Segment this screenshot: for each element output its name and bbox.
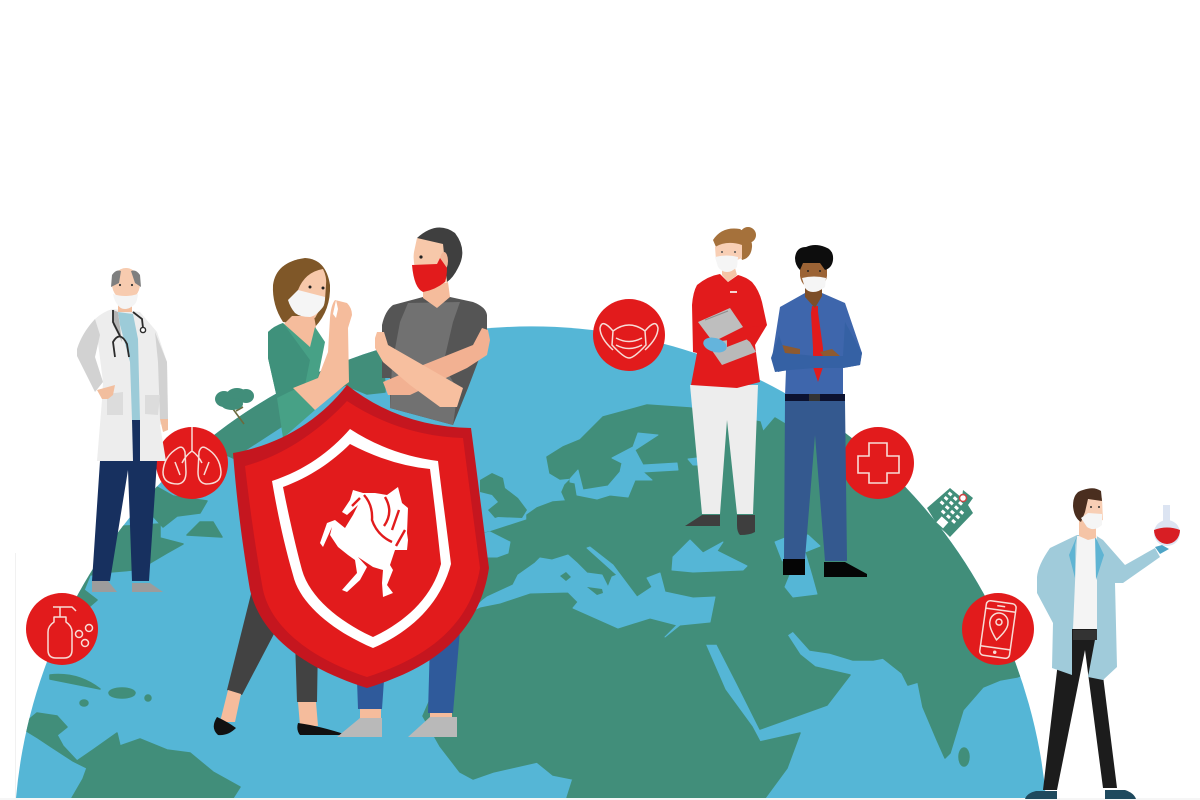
doctor shirt <box>118 312 140 420</box>
woman hair <box>273 258 330 327</box>
woman ankles <box>220 690 318 726</box>
shield face <box>245 401 480 677</box>
doctor eyes <box>119 284 121 286</box>
doctor hands <box>97 385 168 432</box>
shield with horse <box>233 385 489 688</box>
scientist eyes <box>1090 506 1092 508</box>
man under arm <box>383 328 490 395</box>
continents <box>20 335 1060 798</box>
woman eyes <box>308 286 312 288</box>
nurse hair <box>713 228 752 260</box>
shield inner <box>283 444 441 637</box>
scientist belt shade <box>1073 630 1097 640</box>
land: caribbean island two <box>109 688 135 698</box>
land: small island <box>80 700 88 706</box>
nurse eyes <box>721 251 723 253</box>
person: scientist <box>1025 488 1180 799</box>
man face <box>414 238 447 282</box>
nurse bun <box>740 227 756 243</box>
shield rim <box>233 385 489 688</box>
land: small island two <box>145 695 151 701</box>
doctor shoes <box>92 581 163 592</box>
scientist face <box>1082 498 1103 524</box>
doctor coat <box>95 309 168 461</box>
shield white ring <box>272 429 451 648</box>
woman sleeve <box>268 323 310 398</box>
man ear <box>440 252 448 270</box>
stethoscope <box>113 310 143 357</box>
man hair <box>417 228 462 282</box>
globe base line <box>0 798 1200 800</box>
scientist shirt <box>1073 536 1097 629</box>
sea: white sea <box>688 458 698 465</box>
person: man with red mask <box>337 228 490 737</box>
suit head <box>800 262 827 288</box>
suit hair <box>795 245 833 270</box>
woman tissue <box>333 300 338 318</box>
land: british isles <box>480 473 527 518</box>
doctor left sleeve <box>77 319 103 392</box>
icon: lungs <box>156 427 228 499</box>
scientist trousers <box>1043 628 1117 790</box>
suit shoes <box>783 559 867 577</box>
sea: caspian <box>775 535 820 597</box>
scientist neck <box>1079 520 1096 540</box>
land: north america north <box>153 486 208 528</box>
icon: face mask <box>593 299 665 371</box>
nurse shoes <box>685 515 755 535</box>
land: greenland <box>214 350 386 459</box>
land: south america <box>20 713 240 798</box>
suit jacket <box>772 293 862 396</box>
illustration <box>0 227 1200 800</box>
icon: phone with location pin <box>962 593 1034 665</box>
sea: baltic <box>570 433 678 499</box>
suit belt <box>785 394 845 401</box>
woman legs <box>227 590 320 702</box>
suit neck <box>805 286 822 308</box>
person: woman <box>214 258 352 735</box>
seas <box>470 433 820 637</box>
woman shoes <box>214 717 347 735</box>
man shoes <box>337 717 457 737</box>
nurse neck <box>722 268 737 282</box>
man legs <box>357 630 460 713</box>
doctor collar shade <box>113 310 122 342</box>
nurse face <box>715 243 742 265</box>
horse emblem <box>320 487 408 597</box>
doctor head <box>112 268 140 300</box>
suit tie <box>811 306 823 382</box>
doctor trouser gap <box>132 420 140 461</box>
man eye <box>419 255 423 259</box>
horse mane detail <box>352 495 405 546</box>
doctor legs <box>92 461 157 581</box>
ocean <box>16 326 1046 798</box>
icon: medical cross <box>842 427 914 499</box>
person: doctor <box>77 268 168 592</box>
suit eyes <box>807 270 809 272</box>
scientist glove <box>1155 545 1169 554</box>
icon: hospital <box>927 488 973 537</box>
doctor right sleeve <box>155 332 168 419</box>
nurse clipboard <box>698 308 743 342</box>
doctor neck <box>118 300 132 312</box>
suit trousers <box>784 401 847 561</box>
woman neck <box>283 316 316 347</box>
doctor hair <box>111 270 141 287</box>
doctor mask <box>113 294 138 309</box>
nurse glove <box>702 335 728 355</box>
nurse forearm <box>727 325 767 347</box>
man ankles <box>360 709 452 720</box>
nurse mask <box>715 256 738 272</box>
suit hands <box>782 345 840 360</box>
woman mask <box>288 290 325 317</box>
scientist coat <box>1037 535 1160 680</box>
scientist mask <box>1081 513 1102 529</box>
man over arm <box>375 332 463 407</box>
nurse trousers <box>690 385 758 514</box>
nurse badge <box>730 291 737 293</box>
person: nurse <box>685 227 767 535</box>
woman face <box>298 269 326 318</box>
land: arctic island <box>187 522 222 537</box>
sea: mediterranean <box>470 547 715 637</box>
sea: black sea <box>672 540 747 572</box>
land: mediterranean islands <box>560 572 603 595</box>
icon: soap dispenser <box>26 593 98 665</box>
land: caribbean islands <box>50 675 100 689</box>
globe <box>0 326 1200 800</box>
man shirt dark <box>382 297 487 425</box>
woman top <box>268 323 325 438</box>
land: eurasia and africa <box>423 405 1060 798</box>
scientist shoes <box>1025 790 1136 799</box>
doctor pockets <box>107 392 160 415</box>
man mask <box>412 258 447 292</box>
scientist lapels <box>1069 536 1104 580</box>
man shirt centre <box>390 302 460 425</box>
land: north america coast <box>70 524 183 606</box>
nurse clipboard sheet <box>713 338 756 365</box>
person: man in blue suit <box>771 245 867 577</box>
icon: tree <box>215 388 254 424</box>
sea: bay of biscay <box>484 532 510 558</box>
scientist hair <box>1073 488 1102 522</box>
woman arm <box>293 300 352 410</box>
suit folded arms <box>771 322 862 372</box>
nurse top <box>691 274 767 388</box>
man neck <box>423 282 450 308</box>
nurse clipboard clip <box>705 311 728 320</box>
land: sri lanka <box>959 748 969 766</box>
suit mask <box>802 276 826 292</box>
flask <box>1154 505 1180 546</box>
